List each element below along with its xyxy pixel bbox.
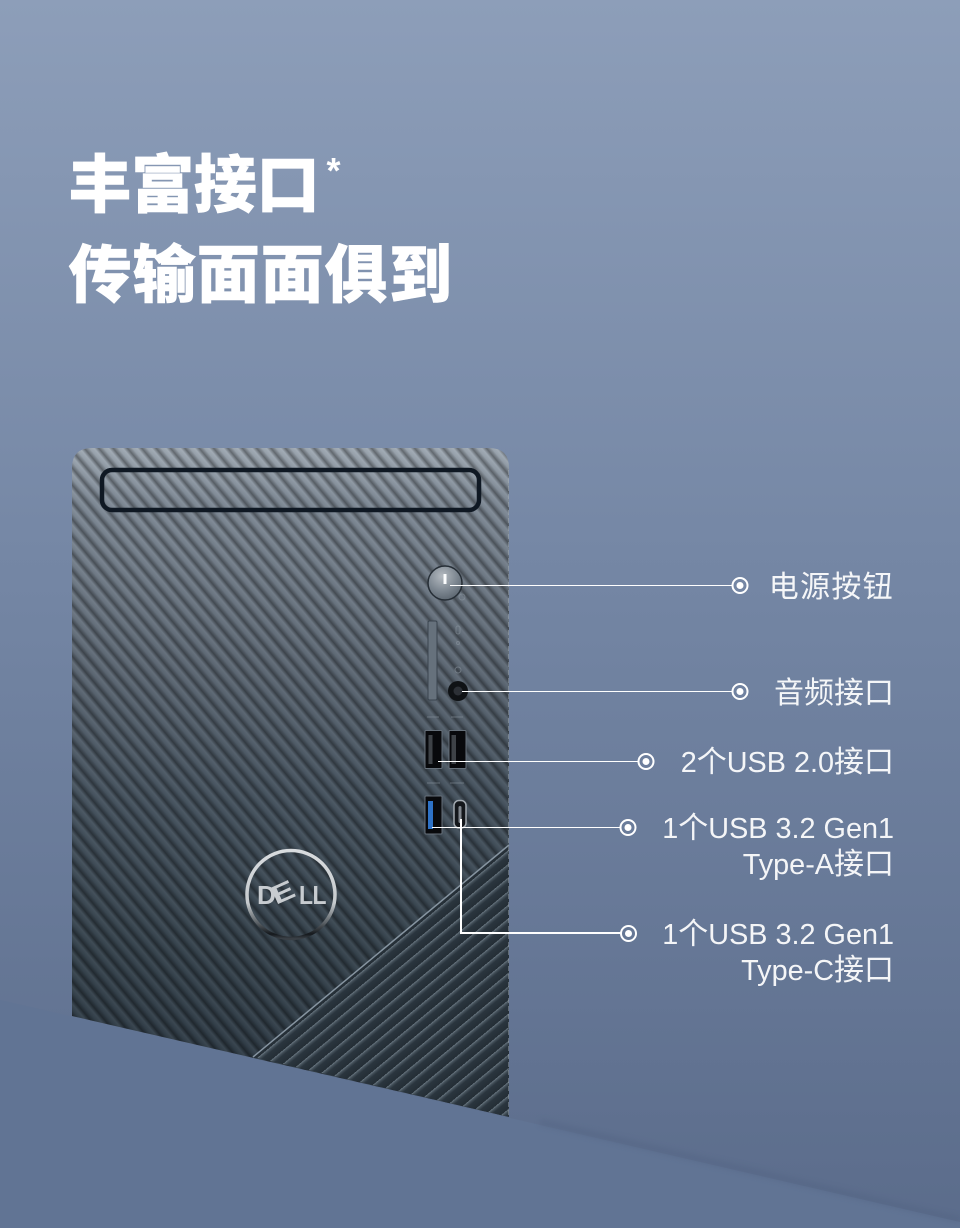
leader line: power button bbox=[450, 578, 748, 593]
label: USB 2.0: 2个USB 2.0接口 bbox=[681, 737, 894, 781]
USB 2.0 ports bbox=[425, 730, 466, 768]
Dell logo: D bbox=[257, 880, 276, 910]
label: USB Type-A bbox=[662, 803, 894, 883]
optical drive slot bbox=[102, 470, 479, 510]
Dell logo: E bbox=[266, 874, 299, 910]
title line 1: 丰富接口 bbox=[68, 135, 319, 226]
tower front panel bbox=[72, 448, 509, 1118]
Dell logo: L bbox=[299, 880, 313, 910]
label: USB Type-C: Type-C接口 bbox=[741, 945, 894, 989]
leader line: audio jack bbox=[462, 684, 748, 699]
label: USB Type-A: 1个USB 3.2 Gen1 bbox=[662, 803, 894, 847]
Dell logo bbox=[247, 850, 335, 938]
lower angled stripe section bbox=[255, 846, 509, 1117]
USB 3.2 Type-C port bbox=[454, 800, 466, 828]
card reader slot bbox=[428, 621, 437, 700]
text: * bbox=[326, 150, 341, 191]
title line 2: 传输面面俱到 bbox=[68, 225, 453, 316]
leader line: USB Type-C bbox=[461, 819, 636, 941]
power button bbox=[428, 566, 465, 600]
label: audio jack: 音频接口 bbox=[774, 668, 894, 712]
audio jack bbox=[448, 681, 468, 701]
leader line: USB Type-A bbox=[432, 820, 636, 835]
label: power button: 电源按钮 bbox=[769, 562, 894, 606]
leader line: USB 2.0 bbox=[438, 754, 654, 769]
indicator marks bbox=[427, 626, 464, 783]
label: USB Type-A: Type-A接口 bbox=[743, 839, 894, 883]
label: USB Type-C: 1个USB 3.2 Gen1 bbox=[662, 909, 894, 953]
label: USB Type-C bbox=[662, 909, 894, 989]
USB 3.2 Type-A port bbox=[425, 796, 442, 834]
Dell logo: L bbox=[312, 880, 327, 910]
